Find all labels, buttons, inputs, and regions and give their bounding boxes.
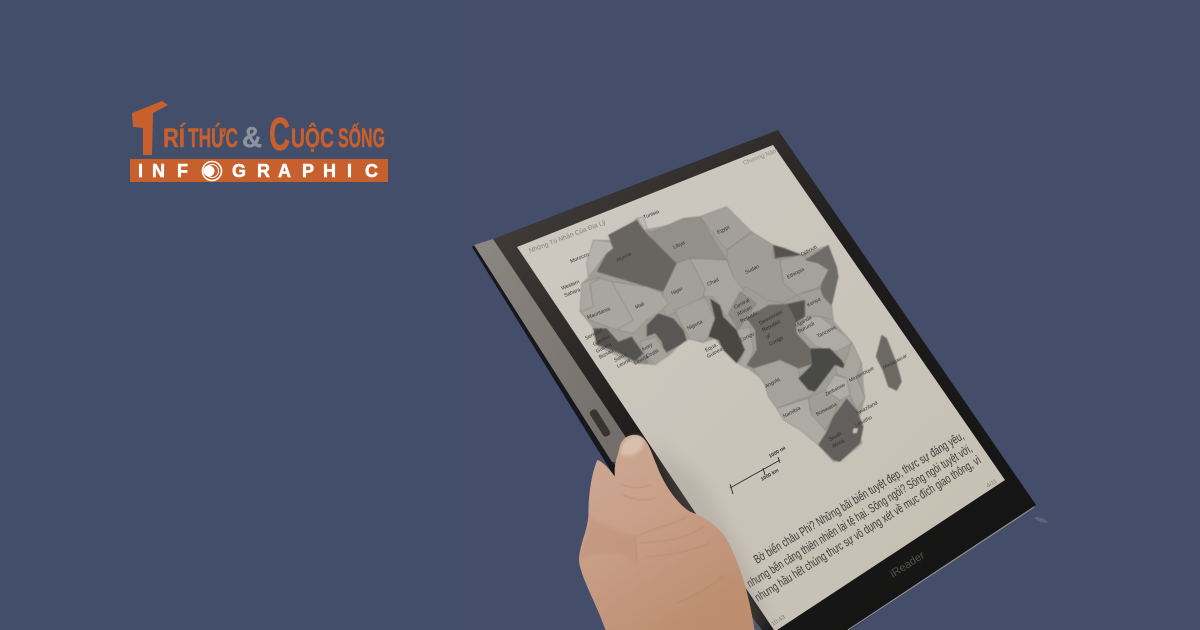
- side button: [589, 408, 611, 438]
- Botswana: [808, 390, 840, 430]
- map country labels: Leone: [616, 358, 632, 370]
- map country labels: Central: [733, 298, 751, 311]
- Egypt: [700, 207, 752, 250]
- map country labels: Equa.: [704, 342, 719, 354]
- Ethiopia: [780, 255, 828, 295]
- West Africa coast and Central Africa countries: [593, 292, 757, 368]
- hand holding device: [579, 435, 755, 630]
- hand shape: [579, 435, 755, 630]
- Burkina Faso and Ghana: [647, 313, 687, 353]
- Tunisia: [637, 217, 648, 232]
- screen header left: Những Tò Nhân Của Địa Lý: [528, 218, 608, 255]
- map country labels: Congo: [768, 335, 785, 348]
- logo wordmark: SỐNG: [338, 121, 385, 153]
- logo wordmark: [163, 108, 385, 160]
- map country labels: Kenya: [806, 297, 822, 309]
- Chad: [690, 258, 743, 317]
- map country labels: Botswana: [815, 402, 838, 418]
- logo wordmark: &: [242, 122, 262, 154]
- map country labels: Gambia: [592, 334, 611, 348]
- map country labels: Guinea: [706, 347, 724, 360]
- Mozambique: [835, 342, 865, 410]
- Algeria: [597, 220, 677, 292]
- Zimbabwe: [825, 375, 850, 400]
- palm shadow: [580, 517, 637, 563]
- map country labels: [561, 209, 909, 450]
- Liberia: [633, 353, 648, 363]
- map country labels: Congo: [739, 331, 756, 344]
- Congo: [737, 327, 753, 368]
- map country labels: Africa: [831, 438, 846, 450]
- South Africa: [818, 398, 863, 462]
- map country labels: Sierra: [613, 352, 628, 364]
- map country labels: Mauritania: [587, 306, 611, 321]
- logo banner: [130, 159, 388, 182]
- East Africa countries: [773, 245, 852, 352]
- Tanzania: [803, 317, 852, 352]
- map country labels: Swaziland: [855, 400, 879, 417]
- map country labels: Tanzania: [816, 325, 837, 340]
- Mauritania: [580, 278, 633, 330]
- map country labels: Lesotho: [854, 415, 873, 429]
- logo swirl O: [202, 162, 222, 180]
- logo wordmark: UỘC: [291, 122, 334, 153]
- map country labels: Algeria: [615, 251, 632, 264]
- map country labels: Burundi: [797, 321, 816, 335]
- map country labels: Niger: [670, 286, 684, 297]
- map country labels: Liberia: [633, 354, 650, 367]
- Cameroon and Gabon: [708, 298, 745, 363]
- map scale bar: [730, 457, 780, 494]
- Mali: [612, 282, 668, 333]
- map country labels: Bissau: [598, 348, 615, 361]
- logo icon: angular T: [132, 101, 168, 155]
- body text on screen: [744, 429, 983, 605]
- logo banner text: INFGRAPHIC: [138, 161, 378, 181]
- map country labels: African: [736, 305, 753, 318]
- map country labels: Mozambique: [848, 365, 875, 384]
- map country labels: South: [828, 431, 843, 443]
- map country labels: Libya: [672, 240, 686, 251]
- North and West Africa countries: [580, 207, 752, 333]
- map country labels: Angola: [764, 377, 781, 390]
- map country labels: Western: [561, 279, 581, 292]
- map country labels: Nigeria: [686, 319, 704, 332]
- Namibia: [777, 398, 827, 445]
- map of Africa: [580, 207, 902, 462]
- Central African Republic: [728, 292, 757, 330]
- map country labels: Djibouti: [800, 244, 818, 258]
- map country labels: Uganda: [794, 315, 813, 329]
- logo: Tri thức & Cuộc sống Infographic: [130, 101, 388, 182]
- Uganda and Rwanda: [787, 300, 805, 323]
- body text on screen: nhưng bến cảng thiên nhiên lại tệ hại. Sông ngòi? Sông ngòi tuyệt vời,: [744, 441, 975, 591]
- Ivory Coast: [640, 337, 668, 365]
- scale labels: 1000 km: [760, 467, 781, 483]
- map country labels: Sahara: [564, 287, 581, 299]
- Angola: [753, 360, 815, 408]
- screen footer: page: 4/11: [986, 478, 999, 490]
- logo wordmark: C: [269, 108, 290, 160]
- Zambia: [798, 348, 848, 392]
- shadow of hand on screen: [650, 440, 770, 630]
- thumbnail: [621, 436, 643, 456]
- Sudan: [727, 232, 797, 303]
- map country labels: Republic: [761, 319, 782, 334]
- map country labels: Chad: [706, 277, 720, 288]
- map country labels: Madagascar: [882, 353, 909, 371]
- Madagascar: [876, 335, 902, 391]
- map country labels: Mali: [634, 301, 645, 311]
- DRC: [747, 304, 815, 368]
- map country labels: of: [765, 333, 772, 341]
- Western Sahara: [580, 277, 600, 312]
- map country labels: Coast: [645, 348, 660, 360]
- brand mark iReader: iReader: [888, 549, 927, 581]
- map country labels: Senegal: [584, 328, 604, 342]
- device body: [472, 130, 1036, 630]
- smudge right of device: [1034, 516, 1048, 524]
- knuckle creases: [620, 483, 723, 603]
- map country labels: Egypt: [716, 224, 731, 236]
- screen footer: time: 10:43: [771, 614, 787, 628]
- map country labels: Namibia: [782, 405, 802, 420]
- scale labels: [760, 445, 787, 483]
- Nigeria: [675, 297, 715, 342]
- Lesotho: [853, 428, 858, 433]
- Somalia: [805, 245, 838, 305]
- Niger: [660, 258, 705, 317]
- map country labels: Guinea: [595, 342, 613, 355]
- map country labels: Morocco: [570, 252, 590, 265]
- map country labels: Ethiopia: [786, 267, 806, 281]
- Libya: [648, 217, 727, 263]
- body text on screen: Bờ biển châu Phi? Những bãi biển tuyệt đẹp, thực sự đáng yêu,: [751, 429, 966, 567]
- Southern Africa countries: [747, 300, 902, 462]
- continent base: [580, 207, 865, 462]
- scale labels: 1000 mi: [768, 445, 787, 460]
- logo wordmark: RÍ: [163, 122, 186, 153]
- map country labels: Democratic: [758, 309, 784, 327]
- grey grip strip: [474, 239, 640, 462]
- e-reader device: [472, 130, 1036, 630]
- map country labels: Ivory: [641, 342, 654, 353]
- Kenya: [797, 288, 833, 320]
- left edge of device: [472, 245, 618, 476]
- screen: [517, 145, 1005, 630]
- body text on screen: nhưng hầu hết chúng thực sự vô dụng xét về mục đích giao thông, vì: [752, 453, 983, 605]
- screen header right: Chương Năm: [743, 148, 779, 167]
- map country labels: Zimbabwe: [824, 382, 847, 398]
- Eritrea: [773, 245, 802, 258]
- map country labels: Sudan: [744, 264, 760, 276]
- Senegal and Guinea: [593, 328, 643, 362]
- silver lower edge highlight: [848, 507, 1034, 630]
- logo wordmark: THỨC: [188, 122, 238, 153]
- Morocco: [587, 240, 613, 277]
- map country labels: Tunisia: [643, 209, 660, 221]
- map country labels: Republic: [739, 310, 760, 325]
